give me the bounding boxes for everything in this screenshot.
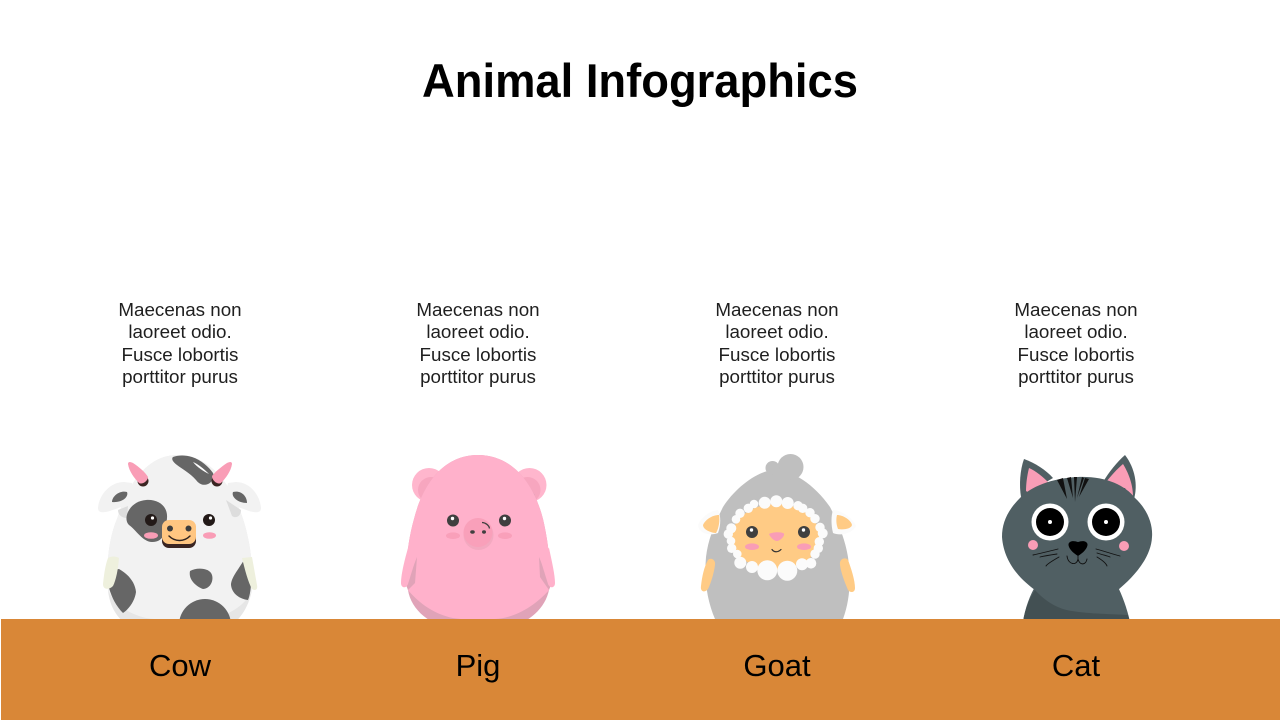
description: goat: Fusce lobortis (719, 344, 835, 365)
description: cow: porttitor purus (122, 366, 238, 387)
description: cow (118, 299, 242, 387)
description: pig (416, 299, 540, 387)
description: goat: Maecenas non (715, 299, 839, 320)
description: pig: Maecenas non (416, 299, 540, 320)
description: cow: laoreet odio. (128, 321, 232, 342)
description: cat: porttitor purus (1018, 366, 1134, 387)
description: pig: laoreet odio. (426, 321, 530, 342)
label: goat: Goat (743, 648, 811, 683)
description: cow: Fusce lobortis (122, 344, 238, 365)
description: goat: laoreet odio. (725, 321, 829, 342)
icon: cat (1002, 455, 1152, 622)
description: cat: laoreet odio. (1024, 321, 1128, 342)
icon: pig (401, 455, 555, 628)
description: pig: porttitor purus (420, 366, 536, 387)
description: cat (1014, 299, 1138, 387)
title: Animal Infographics (422, 54, 858, 107)
icon: cow (98, 455, 261, 651)
icon: goat (698, 454, 856, 630)
description: goat: porttitor purus (719, 366, 835, 387)
label: cow: Cow (149, 648, 211, 683)
ground band (1, 619, 1280, 720)
description: pig: Fusce lobortis (420, 344, 536, 365)
description: cow: Maecenas non (118, 299, 242, 320)
label: pig: Pig (456, 648, 500, 683)
label: cat: Cat (1052, 648, 1100, 683)
description: goat (715, 299, 839, 387)
description: cat: Fusce lobortis (1018, 344, 1134, 365)
description: cat: Maecenas non (1014, 299, 1138, 320)
